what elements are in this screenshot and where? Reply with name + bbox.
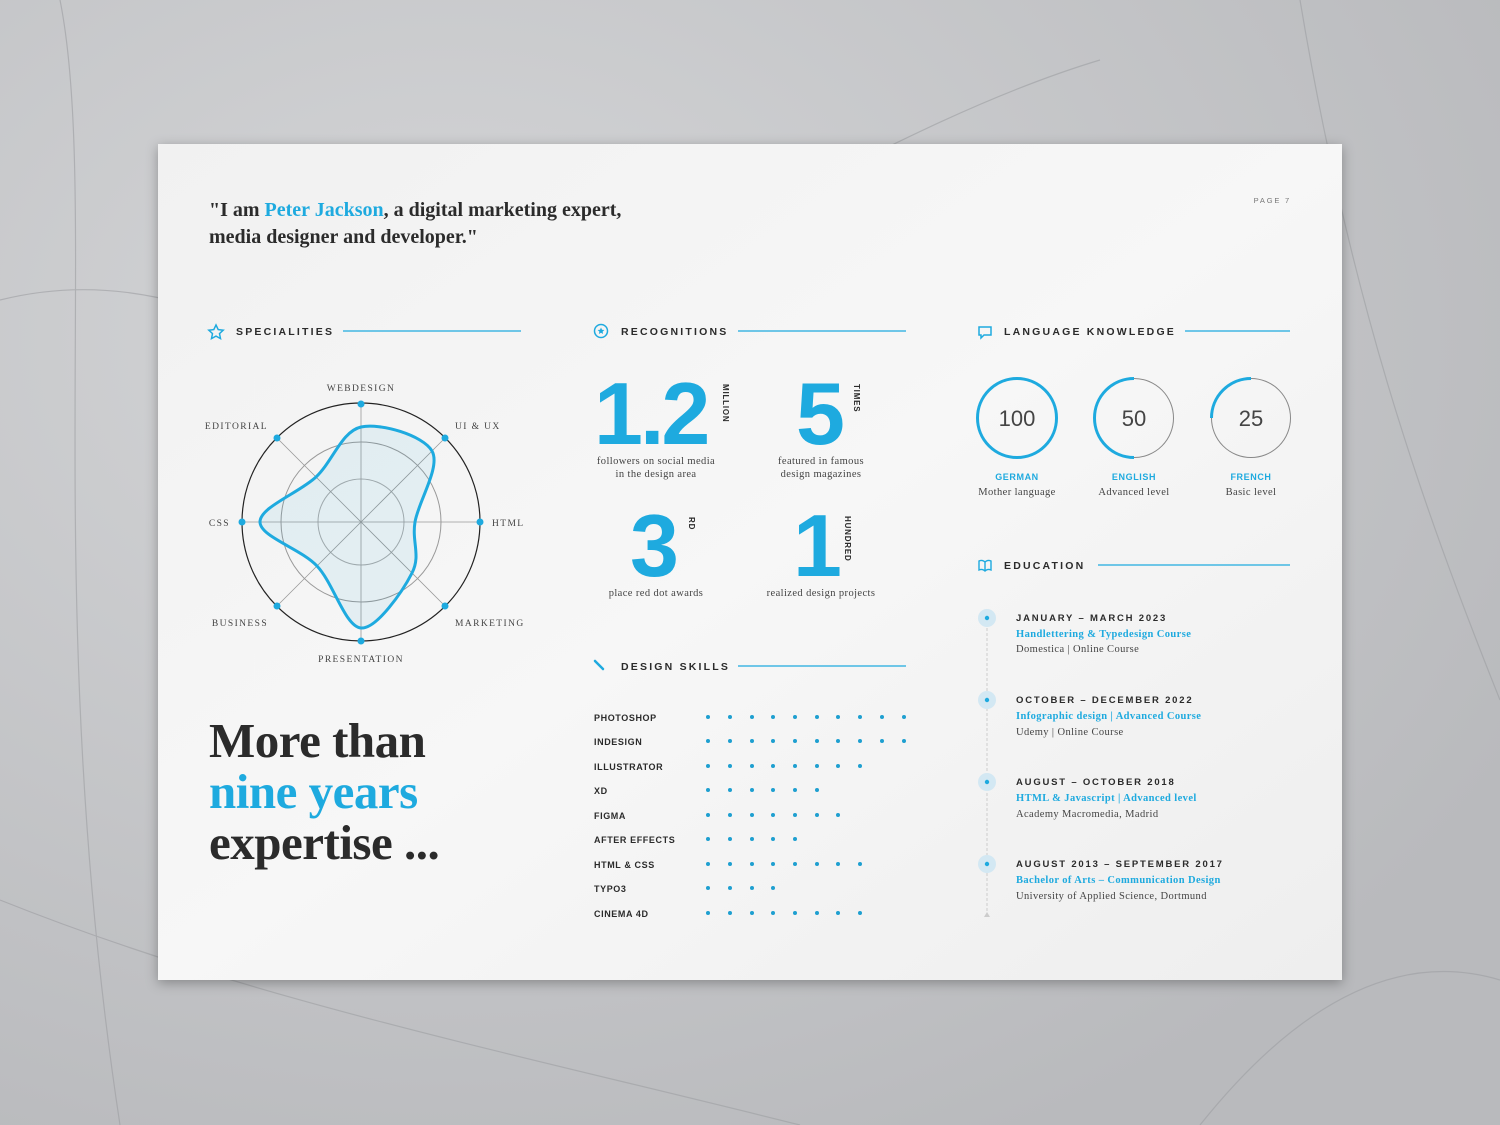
stat: 5 times: featured in famous	[778, 456, 864, 467]
skills dot chart: TYPO3	[594, 884, 627, 894]
stat: 3rd: place red dot awards	[609, 588, 703, 599]
big statement: nine years	[209, 764, 418, 819]
heading: language knowledge	[979, 326, 1290, 338]
radar chart	[205, 384, 525, 665]
education timeline: JANUARY – MARCH 2023	[1016, 613, 1167, 624]
heading: design skills	[595, 661, 906, 673]
big statement: More than	[209, 713, 426, 768]
education timeline: Domestica | Online Course	[1016, 644, 1139, 655]
stat: 3rd: 3	[630, 496, 679, 595]
education timeline: Udemy | Online Course	[1016, 727, 1124, 738]
education timeline: Bachelor of Arts – Communication Design	[1016, 875, 1221, 886]
language: english: 50	[1122, 406, 1146, 431]
stat: 1 hundred: 1	[793, 496, 842, 595]
title quote: "I am Peter Jackson, a digital marketing expert,	[209, 199, 621, 221]
skills dot chart: INDESIGN	[594, 737, 642, 747]
page number: PAGE 7	[1254, 196, 1291, 205]
language: english: ENGLISH	[1112, 472, 1156, 482]
language: french: Basic level	[1226, 487, 1276, 498]
heading: recognitions	[594, 324, 906, 338]
big statement	[209, 713, 439, 870]
skills dot chart: PHOTOSHOP	[594, 713, 657, 723]
stat: 5 times: design magazines	[781, 469, 861, 480]
heading: education: EDUCATION	[1004, 560, 1085, 572]
education timeline	[978, 609, 1224, 917]
heading: design skills: DESIGN SKILLS	[621, 661, 730, 673]
stat: 3rd: RD	[687, 517, 696, 530]
heading: specialities: SPECIALITIES	[236, 326, 334, 338]
radar chart: UI & UX	[455, 422, 501, 432]
stat: 5 times: 5	[796, 364, 845, 463]
skills dot chart: ILLUSTRATOR	[594, 762, 663, 772]
skills dot chart: HTML & CSS	[594, 860, 655, 870]
heading: education	[979, 560, 1290, 572]
skills dot chart	[594, 713, 906, 919]
language: english: Advanced level	[1098, 487, 1170, 498]
radar chart: EDITORIAL	[205, 422, 268, 432]
heading: recognitions: RECOGNITIONS	[621, 326, 728, 338]
language: french: FRENCH	[1230, 472, 1272, 482]
radar chart: CSS	[209, 519, 230, 529]
stat: 1.2 million: MILLION	[721, 384, 730, 422]
language: english	[1094, 378, 1174, 498]
education timeline: HTML & Javascript | Advanced level	[1016, 793, 1197, 804]
education timeline: AUGUST – OCTOBER 2018	[1016, 777, 1176, 788]
title quote: media designer and developer."	[209, 226, 478, 248]
skills dot chart: AFTER EFFECTS	[594, 835, 675, 845]
language: german	[978, 378, 1056, 498]
skills dot chart: FIGMA	[594, 811, 626, 821]
education timeline: University of Applied Science, Dortmund	[1016, 891, 1207, 902]
radar chart: HTML	[492, 519, 525, 529]
language: french	[1212, 378, 1290, 498]
big statement: expertise ...	[209, 815, 439, 870]
education timeline: Infographic design | Advanced Course	[1016, 711, 1201, 722]
radar chart: MARKETING	[455, 619, 525, 629]
stat: 5 times: TIMES	[852, 384, 861, 412]
skills dot chart: XD	[594, 786, 608, 796]
heading: specialities	[209, 325, 521, 339]
language: german: GERMAN	[995, 472, 1039, 482]
language: french: 25	[1239, 406, 1263, 431]
heading: language knowledge: LANGUAGE KNOWLEDGE	[1004, 326, 1176, 338]
education timeline: Handlettering & Typedesign Course	[1016, 629, 1191, 640]
title quote	[209, 199, 621, 248]
radar chart: WEBDESIGN	[327, 384, 395, 394]
stat: 1 hundred: realized design projects	[767, 588, 875, 599]
stat: 1.2 million: in the design area	[616, 469, 696, 480]
stat: 3rd	[609, 496, 703, 599]
education timeline: AUGUST 2013 – SEPTEMBER 2017	[1016, 859, 1224, 870]
education timeline: OCTOBER – DECEMBER 2022	[1016, 695, 1193, 706]
language: german: Mother language	[978, 487, 1056, 498]
radar chart: BUSINESS	[212, 619, 268, 629]
stat: 1.2 million: followers on social media	[597, 456, 715, 467]
language: german: 100	[999, 406, 1035, 431]
radar chart: PRESENTATION	[318, 655, 404, 665]
stat: 1.2 million: 1.2	[594, 364, 707, 463]
stat: 1 hundred: HUNDRED	[843, 516, 852, 562]
skills dot chart: CINEMA 4D	[594, 909, 649, 919]
stat: 1 hundred	[767, 496, 875, 599]
paper sheet	[158, 144, 1342, 980]
education timeline: Academy Macromedia, Madrid	[1016, 809, 1159, 820]
stat: 5 times	[778, 364, 864, 480]
